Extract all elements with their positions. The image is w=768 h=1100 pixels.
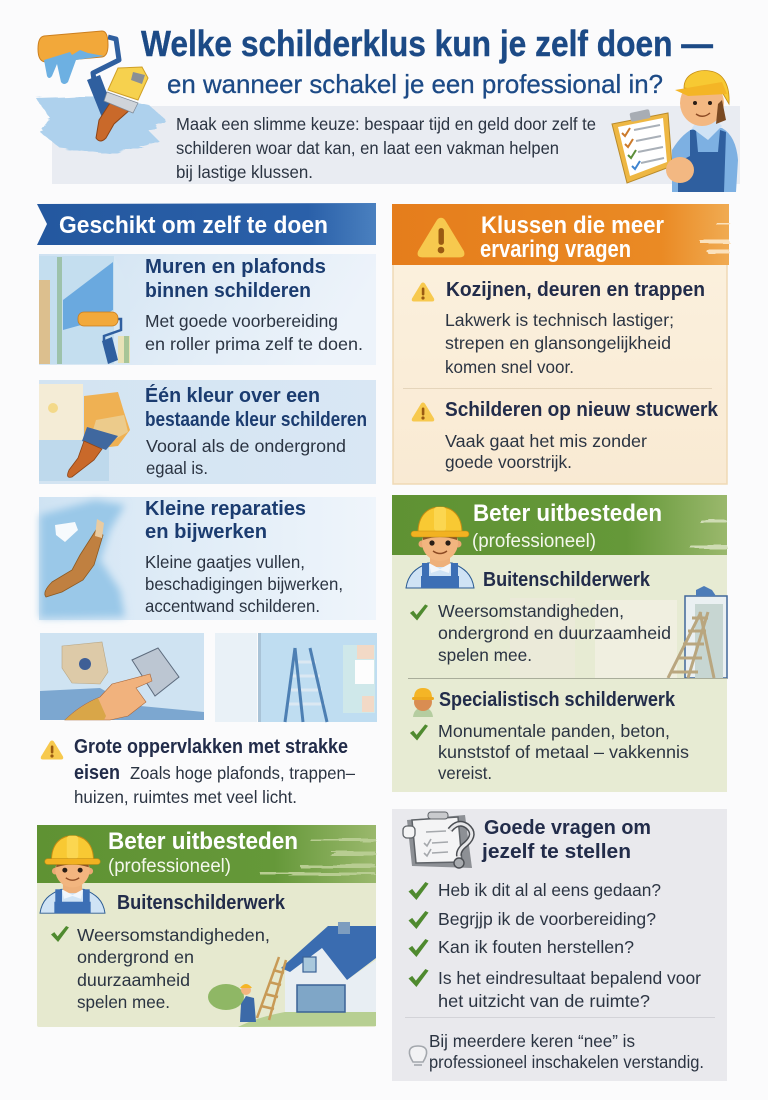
panel: beter uitbesteden rechts	[392, 495, 727, 792]
item 4	[408, 968, 701, 1011]
text: Zoals hoge plafonds, trappen–	[130, 763, 355, 783]
icon: paint roller	[38, 31, 119, 120]
body text	[146, 436, 346, 478]
body text: ondergrond en duurzaamheid	[438, 623, 671, 643]
item 4: Is het eindresultaat bepalend voor	[438, 968, 701, 988]
body text	[77, 925, 270, 1012]
heading	[481, 817, 651, 863]
body text: Monumentale panden, beton,	[438, 721, 670, 741]
header text	[472, 500, 662, 552]
tip text	[429, 1031, 704, 1072]
green header	[392, 495, 727, 555]
icon: worker	[406, 507, 474, 588]
heading: Kozijnen, deuren en trappen	[446, 279, 705, 301]
body text	[145, 552, 343, 616]
body text	[445, 310, 674, 377]
heading	[145, 384, 367, 431]
body text: strepen en glansongelijkheid	[445, 333, 671, 353]
body text: duurzaamheid	[77, 970, 190, 990]
card: muren en plafonds	[39, 254, 376, 365]
section: geschikt om zelf te doen	[37, 203, 377, 1027]
heading	[145, 498, 306, 543]
body text: egaal is.	[146, 458, 208, 478]
body text: Kleine gaatjes vullen,	[145, 552, 305, 572]
heading	[145, 256, 326, 302]
item 2: Begrjjp ik de voorbereiding?	[438, 909, 656, 929]
heading: Één kleur over een	[145, 384, 320, 407]
body text: ondergrond en	[77, 947, 194, 967]
illustration: brush on wall	[39, 384, 130, 481]
subheading: Specialistisch schilderwerk	[439, 689, 676, 711]
callout: grote oppervlakken	[41, 736, 355, 807]
banner text	[480, 212, 664, 263]
body text: accentwand schilderen.	[145, 596, 320, 616]
item 3: Kan ik fouten herstellen?	[438, 937, 634, 957]
heading: bestaande kleur schilderen	[145, 409, 367, 431]
body text: Vaak gaat het mis zonder	[445, 431, 647, 451]
body text: spelen mee.	[438, 645, 532, 665]
body text: en roller prima zelf te doen.	[145, 334, 363, 354]
intro text: schilderen woar dat kan, en laat een vakman helpen	[176, 138, 559, 158]
icon: worker	[40, 836, 105, 913]
body text: kunststof of metaal – vakkennis	[438, 742, 689, 762]
text: Grote oppervlakken met strakke	[74, 736, 348, 758]
body text	[445, 431, 647, 472]
intro text	[176, 114, 596, 182]
intro text: Maak een slimme keuze: bespaar tijd en geld door zelf te	[176, 114, 596, 134]
body text: Lakwerk is technisch lastiger;	[445, 310, 674, 330]
heading: en bijwerken	[145, 521, 267, 543]
checklist	[408, 880, 701, 1011]
header text: Beter uitbesteden	[473, 500, 662, 527]
icon: large warning	[418, 218, 464, 257]
heading: Kleine reparaties	[145, 498, 306, 520]
item 4: het uitzicht van de ruimte?	[438, 991, 650, 1011]
icon: light bulb	[409, 1046, 427, 1065]
header text: (professioneel)	[472, 531, 596, 552]
header	[36, 23, 740, 192]
icon: check	[51, 926, 69, 942]
tip text: professioneel inschakelen verstandig.	[429, 1052, 704, 1072]
banner: geschikt	[37, 203, 376, 245]
banner text: Klussen die meer	[481, 212, 664, 239]
orange banner	[392, 204, 730, 265]
intro band	[52, 106, 740, 184]
heading: Goede vragen om	[484, 817, 651, 839]
subtitle: en wanneer schakel je een professional in?	[167, 69, 663, 99]
icon: clipboard with question mark	[403, 812, 472, 868]
tip text: Bij meerdere keren “nee” is	[429, 1031, 635, 1051]
body text	[438, 721, 689, 783]
illustration: filling hole with putty knife	[40, 633, 204, 720]
icon: check	[410, 604, 428, 621]
card: een kleur	[39, 380, 376, 484]
icon: small worker	[412, 688, 434, 717]
illustration: door with ladder	[510, 586, 727, 678]
heading: binnen schilderen	[145, 280, 311, 302]
body text: vereist.	[438, 763, 492, 783]
text	[74, 736, 355, 807]
item: nieuw stucwerk	[412, 399, 719, 472]
illustration: ladder in room	[215, 633, 377, 722]
panel: beter uitbesteden links	[37, 825, 376, 1027]
body text: spelen mee.	[77, 992, 170, 1012]
banner text: ervaring vragen	[480, 236, 631, 263]
header text: Beter uitbesteden	[108, 828, 298, 855]
body text: Weersomstandigheden,	[438, 601, 624, 621]
icon: warning	[412, 402, 434, 422]
green header	[37, 825, 376, 883]
body text	[438, 601, 671, 665]
panel: goede vragen	[392, 809, 727, 1081]
blue paint splash	[36, 96, 166, 154]
header text	[108, 828, 298, 877]
card: kleine reparaties	[39, 497, 376, 620]
subheading: Buitenschilderwerk	[117, 892, 286, 914]
body text: goede voorstrijk.	[445, 452, 572, 472]
illustration: small brush	[40, 500, 125, 618]
panel: klussen die meer ervaring vragen	[392, 204, 730, 484]
text: huizen, ruimtes met veel licht.	[74, 787, 297, 807]
banner: geschikt: Geschikt om zelf te doen	[59, 212, 328, 239]
item 1: Heb ik dit al al eens gedaan?	[438, 880, 661, 900]
icon: warning	[412, 282, 434, 302]
header text: (professioneel)	[108, 856, 231, 877]
heading: Muren en plafonds	[145, 256, 326, 278]
intro text: bij lastige klussen.	[176, 162, 313, 182]
icon: worker with clipboard	[612, 71, 738, 192]
body text: Vooral als de ondergrond	[146, 436, 346, 456]
illustration: house with ladder	[208, 922, 376, 1027]
body text: Weersomstandigheden,	[77, 925, 270, 945]
body text	[145, 311, 363, 354]
heading: jezelf te stellen	[481, 841, 631, 863]
icon: warning	[41, 740, 63, 760]
icon: paint brush	[96, 67, 148, 141]
tip	[409, 1031, 704, 1072]
illustration: wall with roller	[39, 256, 130, 364]
text: eisen	[74, 762, 120, 784]
icon: check	[410, 724, 428, 741]
subheading: Buitenschilderwerk	[483, 569, 651, 591]
heading: Schilderen op nieuw stucwerk	[445, 399, 719, 421]
item: kozijnen	[412, 279, 705, 377]
body text: Met goede voorbereiding	[145, 311, 338, 331]
body text: beschadigingen bijwerken,	[145, 574, 343, 594]
body text: komen snel voor.	[445, 357, 574, 377]
